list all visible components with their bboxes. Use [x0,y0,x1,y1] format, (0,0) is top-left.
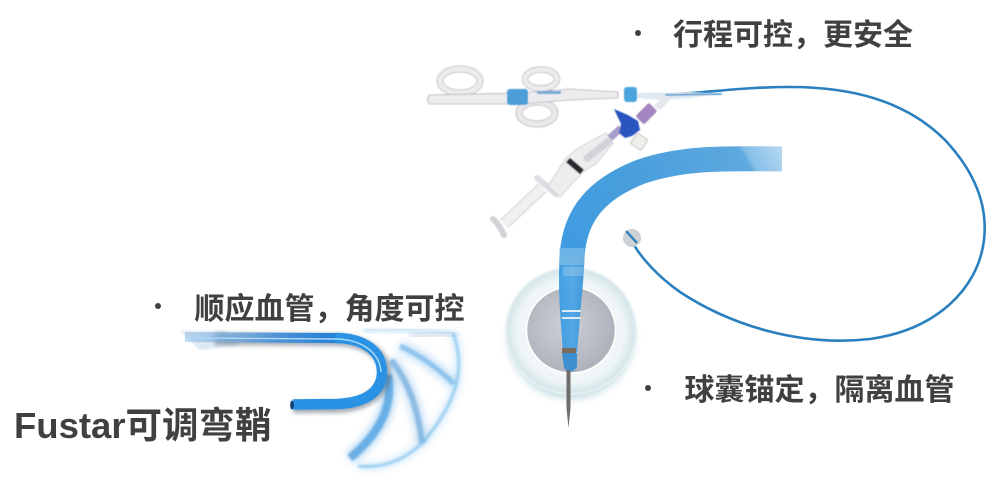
plunger rod [504,188,542,224]
icon: Fustar curved sheath [180,331,385,410]
icon: needle tip [562,348,577,428]
finger ring top [525,70,557,88]
icon: blue sheath tube [559,159,782,352]
icon: small wire ball [623,229,641,247]
bullet text: controlled travel: 行程可控，更安全 [673,19,913,52]
icon: balloon glow shadow [508,275,634,399]
handle shaft [428,89,618,104]
blue collar [507,89,528,105]
finger ring left [440,69,480,93]
plunger disc [493,219,504,235]
distal tubing [637,92,720,100]
violet connector [610,128,621,138]
white cap [630,133,648,151]
icon: blue guide wire [630,87,985,341]
icon: Fustar ghost positions [350,330,459,466]
balloon core [526,287,616,373]
finger ring bottom [519,102,555,124]
barrel flange [537,178,556,194]
stopcock arms [614,109,640,138]
barrel [548,133,613,197]
title: Fustar sheath: Fustar可调弯鞘 [14,405,272,446]
purple luer [635,103,657,125]
rubber stopper [568,160,582,172]
icon: puncture handle [428,69,722,124]
icon: syringe and stopcock [493,95,672,235]
front collar [624,87,637,102]
icon: balloon [505,267,637,395]
bullet text: balloon anchoring: 球囊锚定，隔离血管 [684,374,954,407]
bullet text: compliant vessel: 顺应血管，角度可控 [194,293,464,326]
